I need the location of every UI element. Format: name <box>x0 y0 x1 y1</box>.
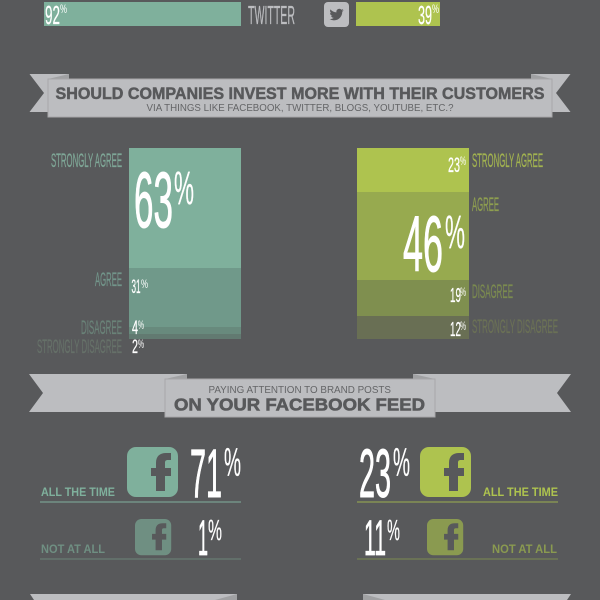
value: 23 percent: 23 <box>359 435 391 512</box>
value: 11 percent <box>364 510 400 566</box>
banner subheading: PAYING ATTENTION TO BRAND POSTS <box>208 385 391 396</box>
chart: left stacked bar: % <box>174 161 194 214</box>
label: not at all: NOT AT ALL <box>492 544 557 556</box>
value: 19 percent: 19 <box>450 285 461 307</box>
text: % <box>224 441 241 485</box>
chart: left stacked bar <box>37 148 241 358</box>
label: all the time: ALL THE TIME <box>41 487 115 499</box>
label: not at all: NOT AT ALL <box>41 544 105 556</box>
banner subheading: VIA THINGS LIKE FACEBOOK, TWITTER, BLOGS, YOUTUBE, ETC.? <box>146 103 454 114</box>
banner heading: SHOULD COMPANIES INVEST MORE WITH THEIR CUSTOMERS <box>56 85 544 103</box>
value: 11 percent: 11 <box>364 510 386 566</box>
value: 71 percent: 71 <box>190 435 222 512</box>
panel: twitter comparison row: TWITTER <box>248 0 295 30</box>
value: 12 percent: 12 <box>450 319 461 341</box>
chart: left stacked bar: DISAGREE <box>81 318 122 339</box>
value: 12 percent: % <box>460 319 466 333</box>
panel: facebook left <box>40 435 241 566</box>
value: 31 percent: 31 <box>132 277 140 298</box>
chart: right stacked bar: % <box>445 205 465 258</box>
right twitter bar: 39 <box>418 0 432 30</box>
banner: facebook feed <box>29 374 571 417</box>
value: 23 percent: 23 <box>448 154 460 177</box>
chart: right stacked bar: DISAGREE <box>472 282 513 303</box>
right twitter bar: % <box>432 2 439 16</box>
left twitter bar: 92 <box>45 0 60 30</box>
label: all the time: ALL THE TIME <box>483 487 558 499</box>
chart: left stacked bar: AGREE <box>95 270 122 291</box>
value: 71 percent <box>190 435 241 512</box>
value: 11 percent: % <box>387 515 400 547</box>
value: 46 percent: 46 <box>403 199 443 288</box>
value: 1 percent: 1 <box>198 510 208 566</box>
icon: facebook faded <box>135 519 171 555</box>
value: 2 percent: 2 <box>132 337 138 358</box>
value: 23 percent <box>359 435 410 512</box>
value: 19 percent: % <box>460 285 466 299</box>
right twitter bar <box>356 0 440 30</box>
chart: left stacked bar: STRONGLY AGREE <box>51 151 122 172</box>
value: 1 percent: % <box>208 515 222 547</box>
chart: right stacked bar: AGREE <box>472 195 499 216</box>
value: 23 percent: % <box>460 154 466 168</box>
left twitter bar <box>44 0 241 30</box>
panel: facebook right <box>357 435 558 566</box>
value: 2 percent: % <box>138 337 144 351</box>
banner: bottom partial ribbon <box>30 594 571 600</box>
icon: facebook faded <box>427 519 463 555</box>
value: 4 percent: % <box>138 318 144 332</box>
value: 63 percent <box>134 155 194 244</box>
icon: twitter bird <box>324 2 349 27</box>
value: 63 percent: 63 <box>134 155 173 244</box>
chart: right stacked bar <box>357 148 558 341</box>
icon: facebook <box>127 447 178 497</box>
banner: should companies invest <box>30 74 570 117</box>
banner heading: ON YOUR FACEBOOK FEED <box>174 394 425 414</box>
value: 4 percent: 4 <box>132 318 138 339</box>
chart: left stacked bar: STRONGLY DISAGREE <box>37 337 122 358</box>
panel: facebook right: % <box>393 441 410 485</box>
icon: facebook <box>420 447 471 497</box>
left twitter bar: % <box>60 2 67 16</box>
panel: twitter comparison row <box>44 0 440 30</box>
value: 31 percent: % <box>141 277 148 291</box>
